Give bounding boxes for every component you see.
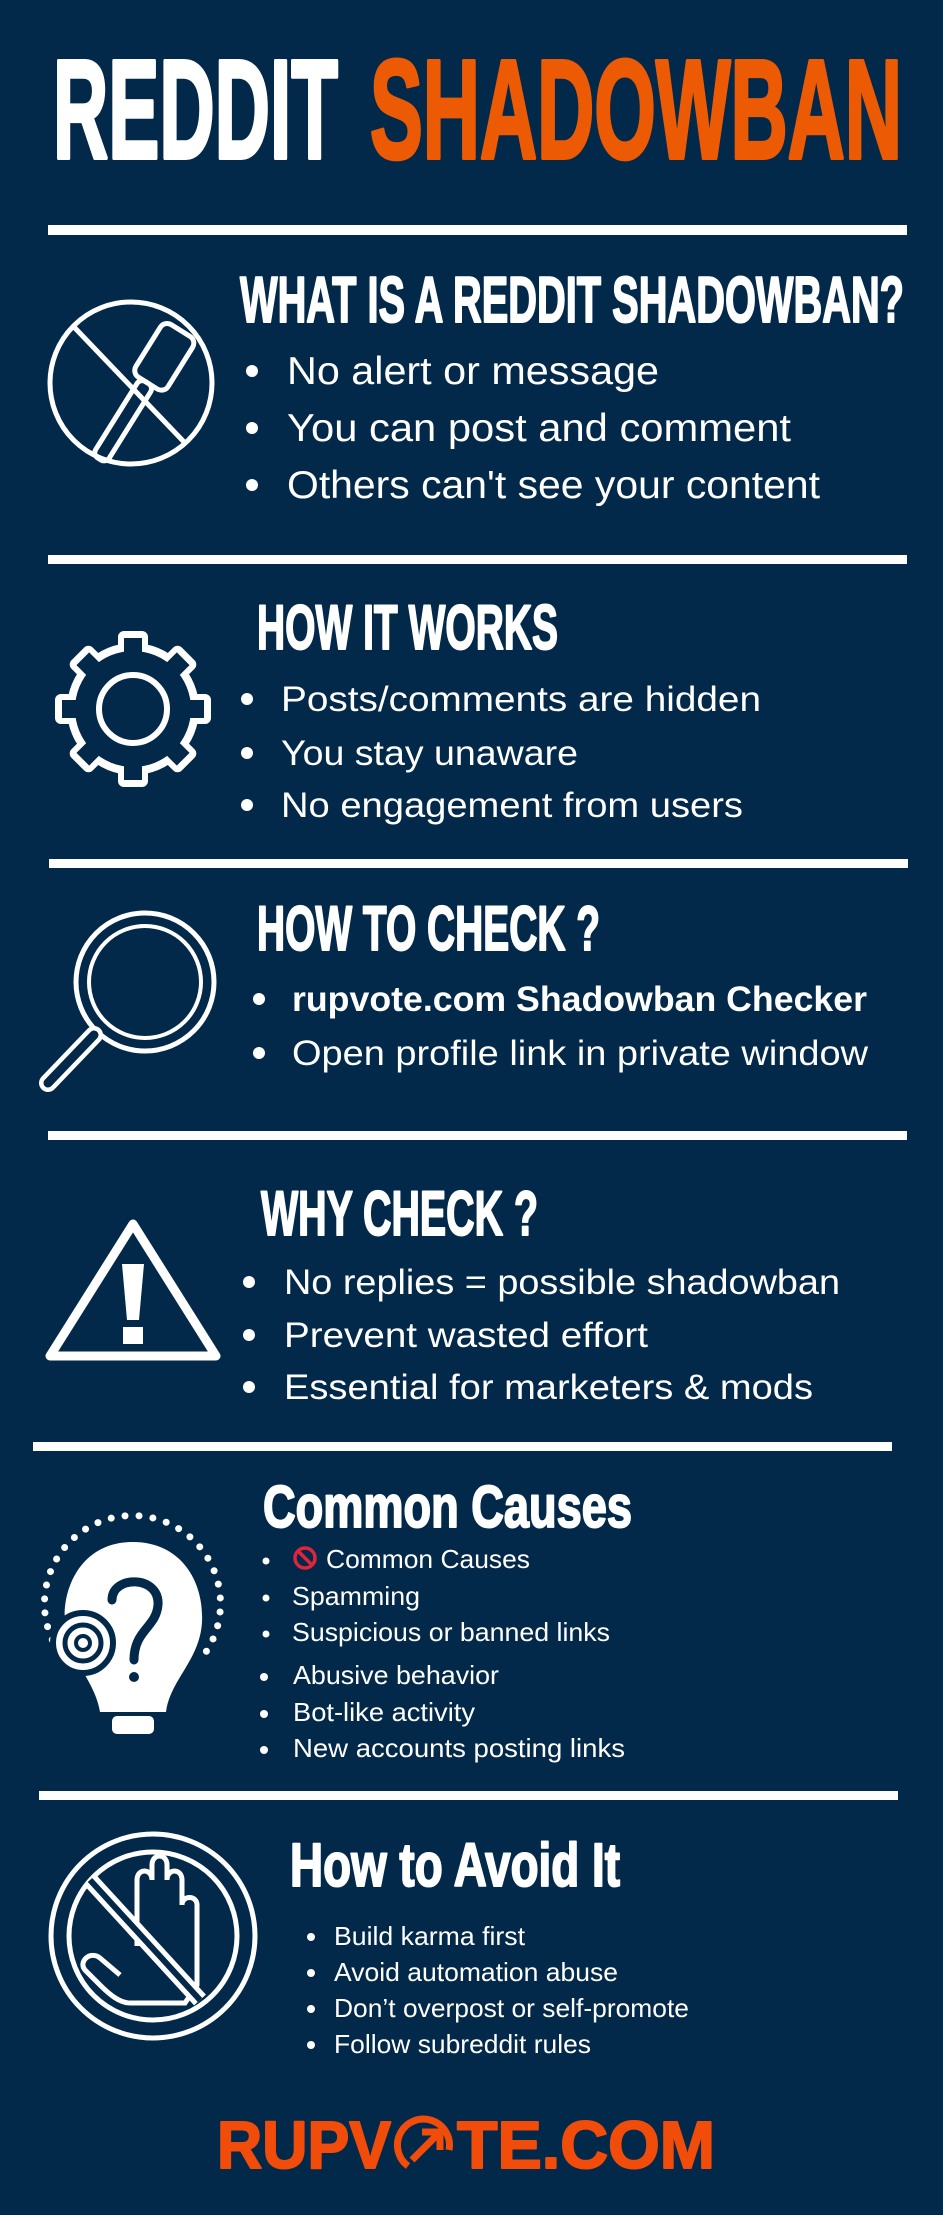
bullets: Open profile link in private window	[292, 1034, 869, 1073]
bullets	[307, 1921, 689, 2059]
panel: common causes	[44, 1474, 632, 1763]
bullets: Don’t overpost or self-promote	[334, 1993, 689, 2023]
bullets: Avoid automation abuse	[334, 1957, 618, 1987]
footer logo: TE.COM	[457, 2108, 715, 2183]
bullets	[241, 680, 761, 825]
heading: How to Avoid It	[290, 1831, 620, 1899]
bullets: Essential for marketers & mods	[284, 1368, 813, 1407]
bullets: Follow subreddit rules	[334, 2029, 591, 2059]
bullets: Suspicious or banned links	[292, 1617, 610, 1647]
bullets	[246, 350, 820, 507]
title	[53, 30, 902, 188]
heading: WHY CHECK ?	[261, 1179, 538, 1249]
icon: gear	[55, 631, 211, 787]
icon: lightbulb	[44, 1516, 220, 1734]
panel: what is	[50, 263, 904, 507]
icon: warning	[50, 1224, 216, 1356]
title: REDDIT	[53, 30, 338, 188]
bullets: Others can't see your content	[287, 464, 820, 507]
panel: how to check	[48, 894, 869, 1083]
panel: how to avoid	[51, 1831, 689, 2059]
bullets: You can post and comment	[287, 407, 791, 450]
heading: HOW TO CHECK ?	[257, 894, 600, 964]
footer logo	[217, 2108, 715, 2183]
icon: banned hammer	[50, 302, 212, 470]
bullets	[253, 980, 869, 1073]
bullets: Common Causes	[326, 1544, 530, 1574]
panel: why check	[50, 1179, 840, 1407]
bullets	[243, 1263, 840, 1407]
heading: HOW IT WORKS	[257, 593, 558, 663]
bullets: Build karma first	[334, 1921, 526, 1951]
bullets: No alert or message	[287, 350, 659, 393]
icon: magnifier	[48, 913, 214, 1083]
bullets: rupvote.com Shadowban Checker	[292, 980, 867, 1019]
footer logo: RUPV	[217, 2108, 391, 2183]
bullets: New accounts posting links	[293, 1733, 625, 1763]
icon: no hand	[51, 1834, 255, 2038]
bullets: You stay unaware	[281, 734, 578, 773]
bullets: Bot-like activity	[293, 1697, 475, 1727]
bullets	[260, 1544, 625, 1763]
bullets: No replies = possible shadowban	[284, 1263, 840, 1302]
heading: Common Causes	[263, 1474, 632, 1540]
bullets: Spamming	[292, 1581, 420, 1611]
bullets: Posts/comments are hidden	[281, 680, 761, 719]
bullets: Abusive behavior	[293, 1660, 499, 1690]
icon: logo O arrow	[397, 2119, 449, 2166]
panel: how it works	[55, 593, 761, 825]
bullets: No engagement from users	[281, 786, 743, 825]
bullets: Prevent wasted effort	[284, 1316, 648, 1355]
